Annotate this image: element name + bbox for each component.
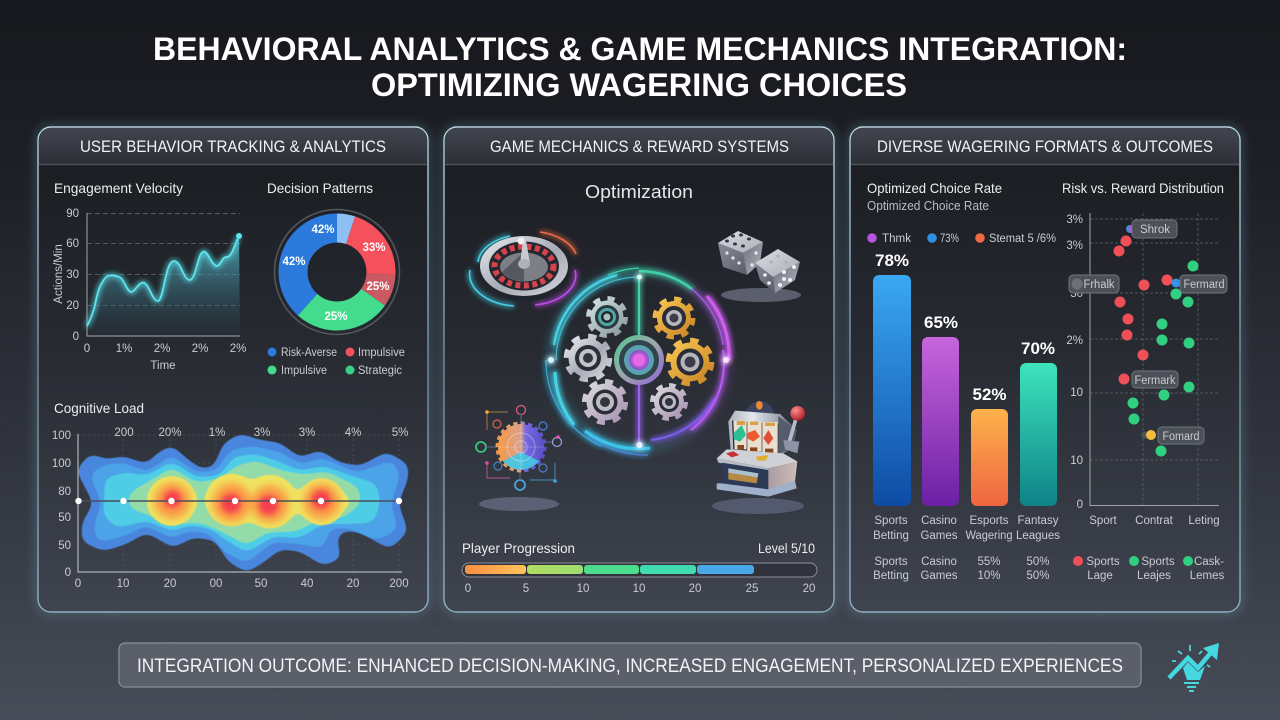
bar chart: optimized choice rate: Sports	[874, 556, 908, 568]
line chart: engagement velocity: 90	[66, 208, 79, 220]
legend: optimized choice rate: Thmk	[882, 233, 911, 245]
progress bar: player progression: 20	[803, 583, 815, 595]
bar chart: optimized choice rate: 78%	[875, 251, 909, 270]
progress bar: player progression: 25	[746, 583, 758, 595]
legend: risk vs reward: Lage	[1087, 570, 1113, 582]
progress bar: player progression: 5	[523, 583, 529, 595]
line chart: engagement velocity: Time	[150, 360, 176, 372]
heatmap: cognitive load: 5%	[392, 427, 408, 439]
callout: integration outcome: INTEGRATION OUTCOME: ENHANCED DECISION-MAKING, INCREASED ENGAGEMENT, PERSONALIZED EXPERIENCES	[137, 656, 1123, 677]
legend: decision patterns: Strategic	[358, 365, 402, 377]
heatmap: cognitive load: 0	[75, 578, 81, 590]
tag: Fomard	[1162, 431, 1200, 443]
scatter plot: risk vs reward: 0	[1077, 499, 1083, 511]
bar chart: optimized choice rate: Fantasy	[1018, 515, 1059, 527]
heatmap: cognitive load: 100	[52, 458, 71, 470]
donut chart: decision patterns: 33%	[362, 242, 386, 254]
heatmap: cognitive load: 200	[114, 427, 134, 439]
panel: diverse wagering formats and outcomes	[850, 127, 1240, 612]
bar chart: optimized choice rate: 65%	[924, 313, 958, 332]
heatmap: cognitive load: 20	[164, 578, 176, 590]
heatmap: cognitive load: 00	[210, 578, 222, 590]
bar chart: optimized choice rate: Games	[920, 530, 958, 542]
scatter plot: risk vs reward	[1066, 213, 1227, 527]
gear: middle left	[568, 338, 608, 378]
heatmap: cognitive load: 0	[65, 567, 71, 579]
bar chart: optimized choice rate: 50%	[1026, 570, 1050, 582]
bar chart: optimized choice rate: Wagering	[966, 530, 1012, 542]
gear: top right	[656, 300, 692, 336]
heatmap: cognitive load: 1%	[209, 427, 225, 439]
donut chart: decision patterns: 42%	[311, 224, 335, 236]
tag: Fermark	[1134, 375, 1176, 387]
bar chart: optimized choice rate: Sports	[874, 515, 908, 527]
heading: engagement velocity: Engagement Velocity	[54, 180, 183, 196]
tag: Fermard	[1184, 279, 1224, 291]
bar chart: optimized choice rate: Esports	[970, 515, 1009, 527]
line chart: engagement velocity: 2%	[192, 343, 208, 355]
tag: Frhalk	[1084, 279, 1115, 291]
legend: optimized choice rate: Stemat 5 /6%	[989, 233, 1056, 245]
scatter plot: risk vs reward: 10	[1070, 387, 1083, 399]
heading: decision patterns: Decision Patterns	[267, 180, 373, 196]
legend: risk vs reward: Cask-	[1194, 556, 1224, 568]
tag	[1132, 371, 1178, 388]
line chart: engagement velocity: 1%	[116, 343, 132, 355]
heatmap: cognitive load: 50	[255, 578, 267, 590]
progress bar: player progression: 10	[577, 583, 589, 595]
bar chart: optimized choice rate: 50%	[1026, 556, 1050, 568]
donut chart: decision patterns: 42%	[282, 256, 306, 268]
scatter plot: risk vs reward: 30	[1070, 288, 1083, 300]
heatmap: cognitive load: 200	[389, 578, 409, 590]
icon: slot machine	[712, 401, 805, 514]
scatter plot: risk vs reward: 10	[1070, 455, 1083, 467]
tag	[1158, 427, 1204, 444]
donut chart: decision patterns	[274, 210, 400, 334]
legend: decision patterns: Risk-Averse	[281, 347, 337, 359]
bar chart: optimized choice rate	[873, 251, 1060, 582]
legend: optimized choice rate	[867, 233, 1056, 245]
heatmap: cognitive load: 50	[58, 540, 71, 552]
heatmap: cognitive load: 20	[347, 578, 359, 590]
heading: optimized choice rate: Optimized Choice Rate	[867, 180, 1002, 196]
progress bar: player progression: 0	[465, 583, 471, 595]
gear: bottom right	[653, 386, 685, 418]
legend: decision patterns: Impulsive	[358, 347, 405, 359]
heading: optimized choice rate	[867, 180, 1002, 213]
donut chart: decision patterns: 25%	[366, 281, 390, 293]
tag	[1069, 275, 1119, 293]
bar chart: optimized choice rate: Betting	[873, 570, 909, 582]
bar chart: optimized choice rate: Leagues	[1016, 530, 1060, 542]
heatmap: cognitive load: 100	[52, 430, 71, 442]
line chart: engagement velocity: 20	[66, 300, 79, 312]
progress bar: player progression: 10	[633, 583, 645, 595]
panel: user behavior tracking and analytics	[38, 127, 428, 612]
legend: risk vs reward: Lemes	[1190, 570, 1225, 582]
scatter plot: risk vs reward: Sport	[1089, 515, 1118, 527]
heading: optimized choice rate: Optimized Choice Rate	[867, 199, 989, 213]
bar chart: optimized choice rate: 55%	[977, 556, 1001, 568]
heatmap: cognitive load: 10	[117, 578, 129, 590]
line chart: engagement velocity: 2%	[230, 343, 246, 355]
line chart: engagement velocity: 2%	[154, 343, 170, 355]
panel heading: USER BEHAVIOR TRACKING & ANALYTICS	[80, 137, 386, 156]
tag	[1180, 275, 1227, 293]
heatmap: cognitive load: 3%	[254, 427, 270, 439]
scatter plot: risk vs reward: Contrat	[1135, 515, 1174, 527]
progress bar: player progression: Level 5/10	[758, 540, 815, 556]
line chart: engagement velocity: 60	[66, 238, 79, 250]
legend: risk vs reward: Sports	[1141, 556, 1175, 568]
panel heading: DIVERSE WAGERING FORMATS & OUTCOMES	[877, 137, 1213, 156]
donut chart: decision patterns: 25%	[324, 311, 348, 323]
gear: top left	[590, 300, 624, 334]
bar chart: optimized choice rate: 70%	[1021, 339, 1055, 358]
heatmap: cognitive load: 4%	[345, 427, 361, 439]
legend: decision patterns	[268, 347, 405, 377]
panel heading: GAME MECHANICS & REWARD SYSTEMS	[490, 137, 789, 156]
bar chart: optimized choice rate: Betting	[873, 530, 909, 542]
progress bar: player progression: Player Progression	[462, 540, 575, 556]
icon: dice	[718, 231, 801, 302]
title: OPTIMIZING WAGERING CHOICES	[371, 67, 907, 103]
bar chart: optimized choice rate: 52%	[972, 385, 1007, 404]
gear: middle right	[670, 342, 710, 382]
heatmap: cognitive load: 50	[58, 512, 71, 524]
gear: bottom left	[586, 382, 624, 422]
scatter plot: risk vs reward: 3%	[1066, 240, 1083, 252]
progress bar: player progression: 20	[689, 583, 701, 595]
title	[153, 31, 1127, 103]
callout: integration outcome	[119, 643, 1141, 687]
heatmap: cognitive load: 20%	[158, 427, 182, 439]
heading: risk vs reward distribution: Risk vs. Reward Distribution	[1062, 180, 1224, 196]
heatmap: cognitive load	[52, 427, 409, 590]
hub	[614, 335, 664, 385]
tag: Shrok	[1140, 224, 1170, 236]
heatmap: cognitive load: 80	[58, 486, 71, 498]
bar chart: optimized choice rate: Casino	[921, 556, 957, 568]
line chart: engagement velocity: 0	[73, 331, 79, 343]
heading: cognitive load: Cognitive Load	[54, 400, 144, 416]
line chart: engagement velocity: 30	[66, 269, 79, 281]
bar chart: optimized choice rate: 10%	[977, 570, 1001, 582]
line chart: engagement velocity: Actions/Min	[53, 244, 65, 304]
diagram: central optimization ring	[546, 268, 729, 455]
legend: risk vs reward: Sports	[1086, 556, 1120, 568]
scatter plot: risk vs reward: Leting	[1188, 515, 1220, 527]
heatmap: cognitive load: 3%	[299, 427, 315, 439]
tag	[1132, 220, 1177, 238]
legend: decision patterns: Impulsive	[281, 365, 327, 377]
legend: risk vs reward	[1073, 556, 1225, 582]
legend: optimized choice rate: 73%	[940, 233, 959, 245]
bar chart: optimized choice rate: Casino	[921, 515, 957, 527]
icon: network gear	[476, 406, 562, 511]
scatter plot: risk vs reward: 3%	[1066, 214, 1083, 226]
heatmap: cognitive load: 40	[301, 578, 313, 590]
progress bar: player progression	[462, 540, 817, 595]
bar chart: optimized choice rate: Games	[920, 570, 958, 582]
scatter plot: risk vs reward: 2%	[1066, 335, 1083, 347]
title: BEHAVIORAL ANALYTICS & GAME MECHANICS INTEGRATION:	[153, 31, 1127, 67]
line chart: engagement velocity	[53, 208, 246, 372]
heading: optimization: Optimization	[585, 182, 693, 202]
icon: rising arrow light bulb	[1169, 643, 1219, 691]
legend: risk vs reward: Leajes	[1137, 570, 1171, 582]
panel: game mechanics and reward systems	[444, 127, 834, 612]
line chart: engagement velocity: 0	[84, 343, 90, 355]
icon: roulette wheel	[470, 232, 576, 306]
